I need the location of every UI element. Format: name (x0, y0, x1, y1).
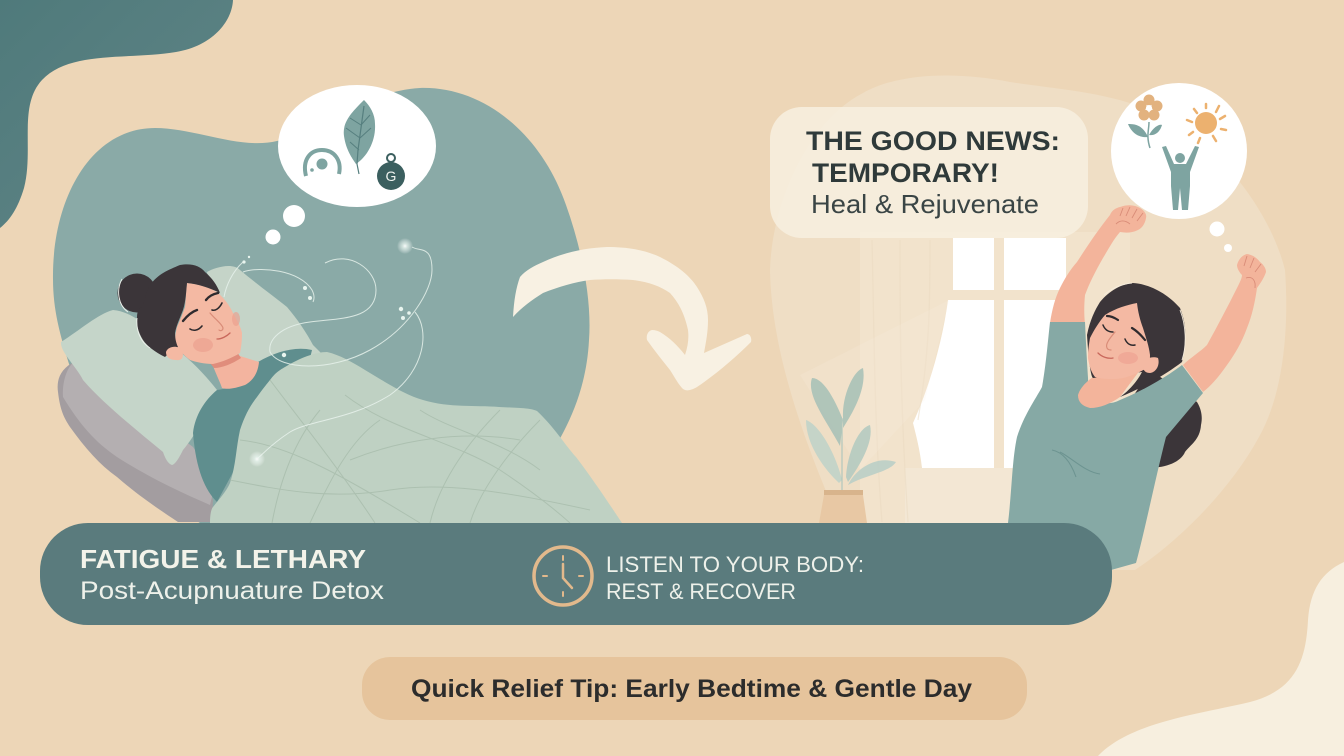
thought bubble trail (266, 205, 305, 244)
blush (193, 312, 240, 352)
energy sparkles (242, 238, 413, 467)
energy swirl lines (224, 247, 432, 458)
neck (213, 356, 259, 389)
face (1088, 303, 1150, 379)
icon: cell ring (305, 150, 340, 176)
plant (806, 368, 896, 490)
window (800, 232, 1130, 523)
lower left pane with curtain edge (913, 300, 994, 468)
blanket quilting lines (230, 380, 590, 523)
heading: temporary: TEMPORARY! (812, 158, 999, 188)
thought bubble (278, 85, 436, 207)
upper left pane (953, 238, 994, 290)
shirt (1008, 322, 1203, 570)
light beam (800, 300, 949, 470)
blush (1118, 352, 1138, 364)
back pillow (207, 266, 322, 366)
heading: the good news: THE GOOD NEWS: (806, 126, 1060, 156)
tip text: Quick Relief Tip: Early Bedtime & Gentle Day (411, 675, 972, 703)
bed (58, 362, 216, 522)
right raised arm (1183, 254, 1266, 392)
face (175, 283, 242, 364)
subheading: heal and rejuvenate: Heal & Rejuvenate (811, 189, 1039, 219)
plant pot (819, 490, 867, 523)
icon: person with raised arms (1162, 146, 1199, 210)
arrow: curved transition (513, 247, 751, 390)
thought bubble (1111, 83, 1247, 219)
upper right pane (1004, 238, 1066, 290)
panel: waking woman (770, 76, 1286, 570)
window wall glow (860, 232, 1130, 523)
front pillow (61, 310, 217, 465)
icon: clock (534, 547, 592, 605)
neck (1078, 370, 1140, 408)
bun hair strand (119, 279, 150, 348)
left raised arm (1050, 205, 1146, 324)
text bubble (770, 107, 1088, 238)
teal background blob (53, 88, 590, 523)
left curtain folds (872, 240, 930, 522)
window sill (905, 468, 1015, 523)
banner: fatigue and rest (40, 523, 1112, 625)
icon: weight G (377, 154, 405, 190)
closed eyes, brows, nose and smile (183, 293, 230, 339)
ear (166, 347, 183, 360)
panel: sleeping woman (53, 85, 622, 523)
back hair (1118, 370, 1202, 468)
hair and bun (118, 264, 220, 357)
blanket (210, 352, 622, 523)
eyes, brows, nose, smile (1098, 316, 1145, 358)
icon: sun (1187, 104, 1226, 143)
lower right pane (1004, 300, 1066, 468)
icon: flower (1128, 94, 1162, 148)
decorative blob: bottom right (1098, 562, 1344, 756)
thought bubble trail (1210, 222, 1232, 252)
text: rest and recover: REST & RECOVER (606, 579, 796, 604)
ear (1143, 357, 1159, 373)
front hair (1087, 283, 1185, 397)
hair highlight (1104, 283, 1185, 360)
shirt (193, 349, 312, 502)
subheading: post-acupuncture detox: Post-Acupnuature Detox (80, 577, 385, 605)
icon: leaf (344, 100, 375, 174)
heading: fatigue and lethary: FATIGUE & LETHARY (80, 544, 366, 574)
neck shadow (210, 352, 241, 368)
text: listen to your body: LISTEN TO YOUR BODY: (606, 552, 864, 577)
quick relief tip pill (362, 657, 1027, 720)
pale background blob (770, 76, 1286, 570)
icon: weight G: G (386, 168, 396, 184)
shirt folds (1052, 450, 1100, 477)
decorative blob: top left (0, 0, 233, 228)
